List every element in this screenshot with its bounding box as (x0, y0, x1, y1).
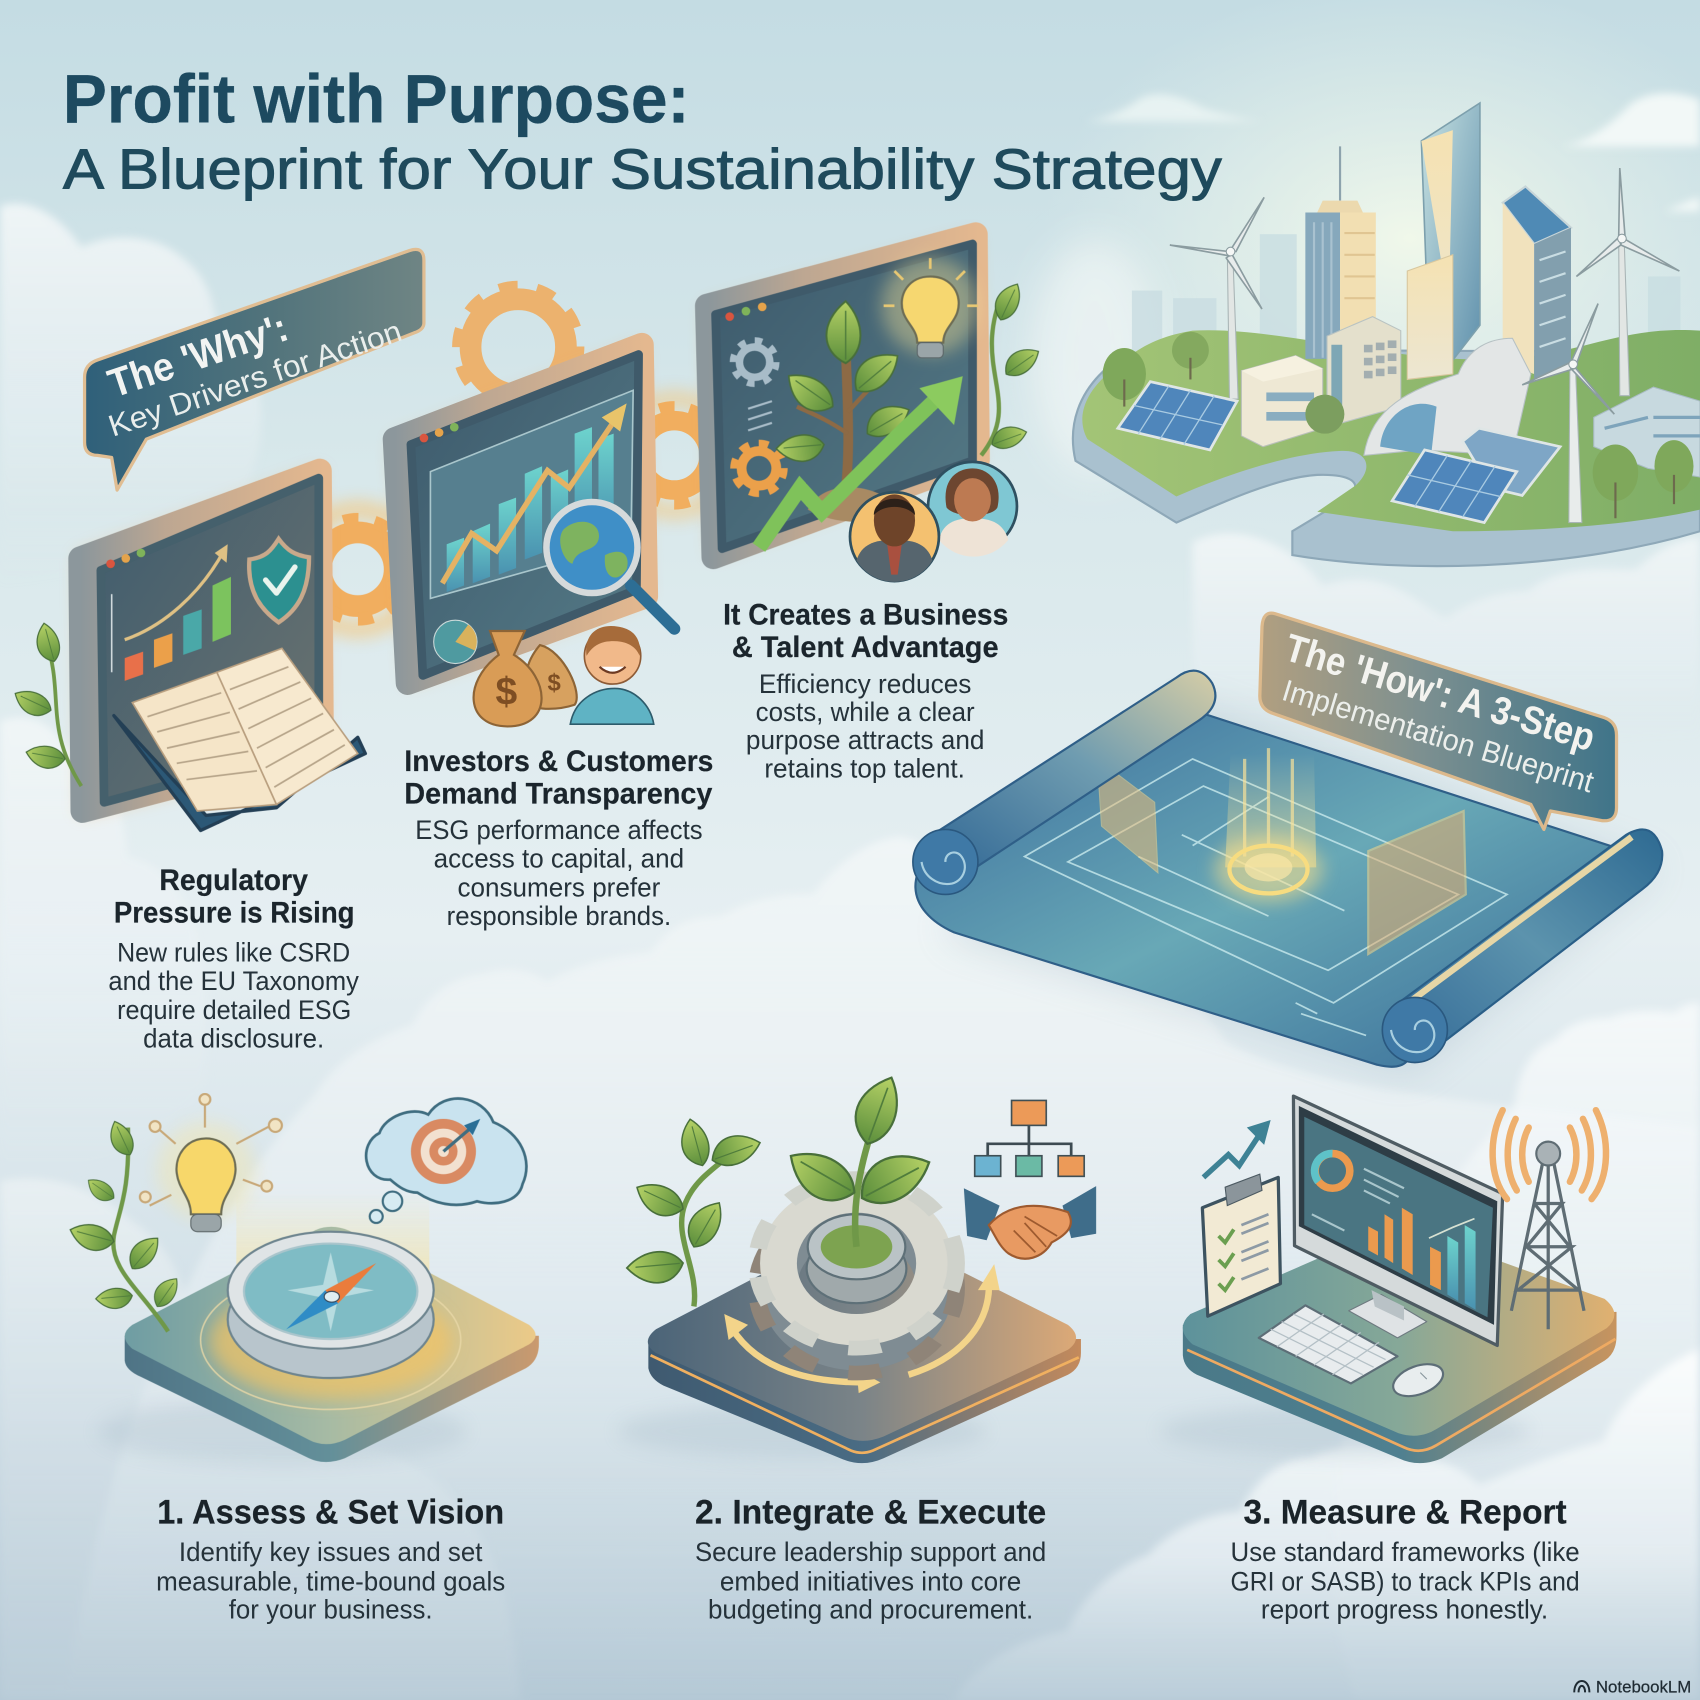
icon: money bags (474, 631, 577, 726)
text: regulatory pressure (108, 865, 359, 1053)
wind turbine right (1576, 168, 1679, 396)
icon: money bags: $ (548, 670, 561, 697)
step 1 text: 1. Assess & Set Vision (157, 1493, 504, 1531)
icon: mouse (1389, 1358, 1447, 1402)
panel: regulatory screen (10, 468, 365, 830)
text: investors and customers (404, 746, 713, 931)
solar panel right pair (1392, 428, 1560, 523)
text: regulatory pressure: require detailed ESG (117, 994, 351, 1025)
text: regulatory pressure: Pressure is Rising (114, 898, 355, 930)
rising bar chart (112, 544, 231, 681)
text: investors and customers: responsible brands. (447, 900, 671, 931)
solar panel left (1118, 382, 1237, 450)
icon: trend arrow (1203, 1120, 1271, 1177)
dome tunnel (1364, 338, 1531, 455)
icon: gears behind panels (298, 287, 731, 629)
text: regulatory pressure: and the EU Taxonomy (108, 965, 359, 996)
wind turbine left (1170, 197, 1264, 399)
text: regulatory pressure: New rules like CSRD (117, 937, 350, 968)
text: investors and customers: Investors & Customers (404, 746, 713, 778)
pie chart (434, 620, 477, 664)
city island illustration (1073, 103, 1700, 566)
icon: compass (228, 1232, 434, 1378)
hologram glow (1097, 748, 1466, 954)
step 2 text: 2. Integrate & Execute (695, 1493, 1046, 1531)
upper roll (913, 671, 1215, 894)
panel: the why heading bubble: Key Drivers for Action (105, 315, 406, 444)
icon: sprout (779, 1070, 938, 1247)
icon: lightbulb with nodes (140, 1094, 282, 1232)
text: regulatory pressure: Regulatory (159, 865, 309, 897)
glass skyscraper (1407, 103, 1480, 379)
icon: magnifier globe (546, 502, 674, 629)
low building (1241, 356, 1323, 447)
step 1 text: Identify key issues and set (179, 1536, 483, 1567)
text: talent advantage: It Creates a Business (723, 599, 1008, 631)
step 2 text: budgeting and procurement. (708, 1594, 1033, 1625)
line and bar chart (430, 390, 633, 598)
icon: org chart (975, 1100, 1084, 1176)
panel: the why heading bubble (85, 249, 424, 490)
step 3 text: Use standard frameworks (like (1231, 1536, 1580, 1567)
panel: the how heading bubble (1260, 613, 1617, 829)
step 3 illustration (1160, 1096, 1617, 1463)
icon: grey gear (733, 340, 776, 384)
striped tower (1305, 146, 1376, 359)
step 3 text: 3. Measure & Report (1244, 1493, 1567, 1531)
icon: vine (10, 621, 81, 786)
text: talent advantage: Efficiency reduces (759, 668, 971, 699)
text: talent advantage (723, 599, 1008, 783)
platform (125, 1227, 539, 1462)
tree (1172, 332, 1209, 379)
text: investors and customers: Demand Transparency (404, 778, 713, 810)
text: regulatory pressure: data disclosure. (143, 1022, 324, 1053)
panel: the why heading bubble: The 'Why': (103, 306, 294, 406)
icon: vine (981, 279, 1044, 455)
platform (1183, 1227, 1617, 1463)
step 1 text: for your business. (229, 1594, 433, 1625)
blueprint lines (1025, 759, 1507, 1035)
step 2 text (695, 1493, 1046, 1625)
icon: clipboard checklist (1202, 1174, 1280, 1316)
icon: money bags: $ (495, 671, 517, 714)
text: investors and customers: consumers prefer (458, 872, 660, 903)
icon: smiling customer (570, 626, 654, 724)
text: investors and customers: access to capital, and (434, 842, 684, 873)
tree (1103, 348, 1146, 407)
step 1 text (156, 1493, 505, 1625)
list lines (748, 401, 772, 430)
step 1 text: measurable, time-bound goals (156, 1565, 505, 1596)
text: talent advantage: purpose attracts and (746, 724, 984, 755)
text: talent advantage: retains top talent. (764, 752, 965, 783)
icon: thought cloud target (366, 1099, 526, 1223)
panel: the how heading bubble: Implementation Blueprint (1278, 674, 1598, 800)
wind turbine front (1522, 304, 1614, 523)
step 3 text: report progress honestly. (1261, 1594, 1548, 1625)
watermark: NotebookLM: NotebookLM (1596, 1678, 1691, 1696)
flow arrows (724, 1264, 1000, 1393)
step 2 text: Secure leadership support and (695, 1536, 1046, 1567)
lower roll (1382, 829, 1662, 1062)
step 2 text: embed initiatives into core (720, 1565, 1021, 1596)
blueprint sheet (915, 710, 1626, 1067)
icon: open book (114, 648, 365, 830)
icon: signal tower (1493, 1110, 1606, 1329)
icon: keyboard (1259, 1305, 1398, 1383)
icon: sapling tree (775, 301, 915, 522)
tree (1593, 445, 1638, 518)
text: talent advantage: costs, while a clear (756, 696, 975, 727)
office right (1594, 387, 1700, 477)
panel: the how heading bubble: The 'How': A 3-Step (1280, 627, 1600, 760)
icon: lightbulb (881, 257, 979, 358)
title: A Blueprint for Your Sustainability Strategy (63, 138, 1223, 201)
text: talent advantage: & Talent Advantage (732, 632, 999, 664)
icon: green growth arrow (759, 376, 963, 548)
icon: monitor dashboard (1293, 1096, 1503, 1345)
platform (648, 1227, 1081, 1463)
step 2 illustration (618, 1070, 1096, 1463)
panel: investors screen (392, 343, 674, 726)
icon: shield with check (249, 539, 309, 622)
step 3 text (1231, 1493, 1580, 1625)
icon: left plant (626, 1116, 764, 1306)
step 3 text: GRI or SASB) to track KPIs and (1231, 1565, 1580, 1596)
solar roof tower (1503, 186, 1571, 379)
step 1 illustration (67, 1094, 539, 1464)
skyline silhouettes (1132, 234, 1680, 374)
icon: plant (67, 1118, 183, 1331)
text: investors and customers: ESG performance affects (415, 814, 703, 845)
icon: woman avatar (928, 462, 1017, 557)
tree (1654, 440, 1693, 504)
tree (1305, 395, 1344, 434)
blueprint scroll (913, 671, 1662, 1073)
title (63, 62, 1223, 201)
panel: talent advantage screen (705, 234, 1044, 582)
title: Profit with Purpose: (63, 62, 690, 138)
icon: handshake (964, 1186, 1096, 1259)
grid window building (1327, 317, 1401, 423)
icon: man avatar (850, 492, 939, 582)
icon: orange gear (734, 443, 784, 493)
icon: gear (757, 1179, 956, 1373)
island base (1073, 347, 1700, 566)
